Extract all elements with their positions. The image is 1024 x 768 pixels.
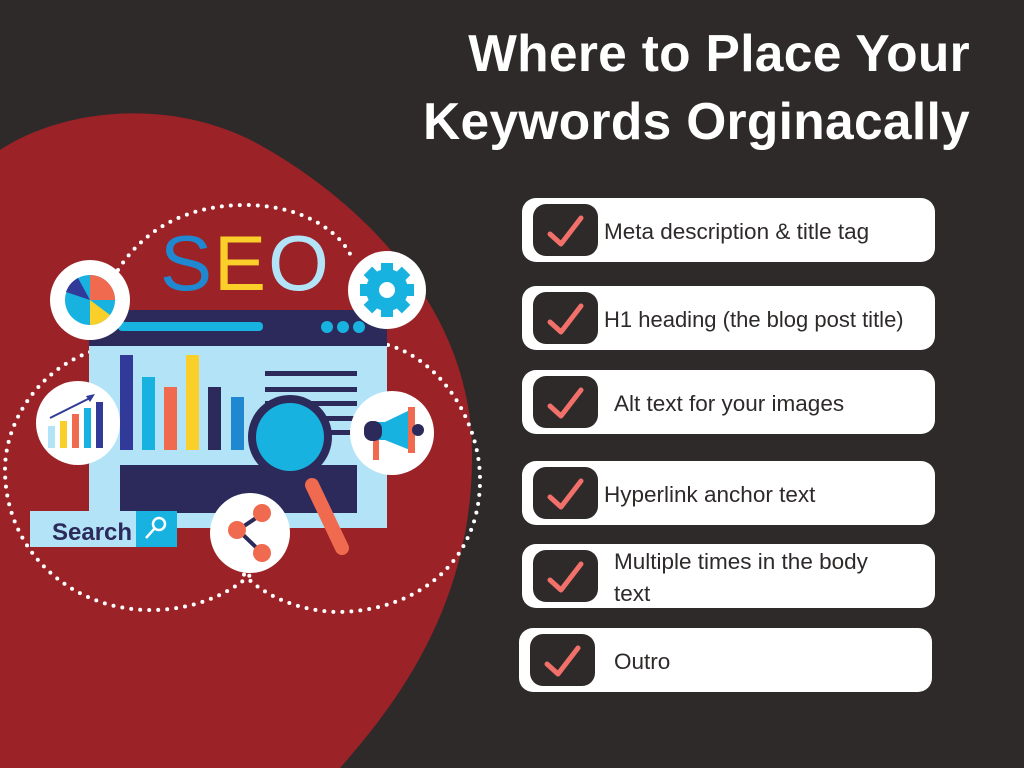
item 4: Hyperlink anchor text [604, 482, 815, 507]
icon: megaphone [350, 391, 434, 475]
item 5 [522, 544, 935, 608]
item 5: Multiple times in the body text [614, 549, 868, 606]
search box: Search [52, 519, 132, 546]
item 3: Alt text for your images [614, 391, 844, 416]
icon: share [210, 493, 290, 573]
item 6: Outro [614, 649, 670, 674]
magnifier [248, 395, 342, 548]
item 3 [522, 370, 935, 434]
red blob [0, 113, 472, 768]
icon: gear [348, 251, 426, 329]
title: Where to Place Your [468, 24, 970, 82]
browser window [89, 310, 387, 528]
item 6 [519, 628, 932, 692]
SEO text: SEO [160, 219, 331, 307]
icon: pie [50, 260, 130, 340]
item 2: H1 heading (the blog post title) [604, 307, 904, 332]
item 4 [522, 461, 935, 525]
item 1 [522, 198, 935, 262]
title: Keywords Orginacally [423, 92, 970, 150]
search box [30, 511, 177, 547]
item 1: Meta description & title tag [604, 219, 869, 244]
title [423, 24, 970, 150]
item 2 [522, 286, 935, 350]
dotted orbits [5, 205, 480, 612]
icon: growth chart [36, 381, 120, 465]
